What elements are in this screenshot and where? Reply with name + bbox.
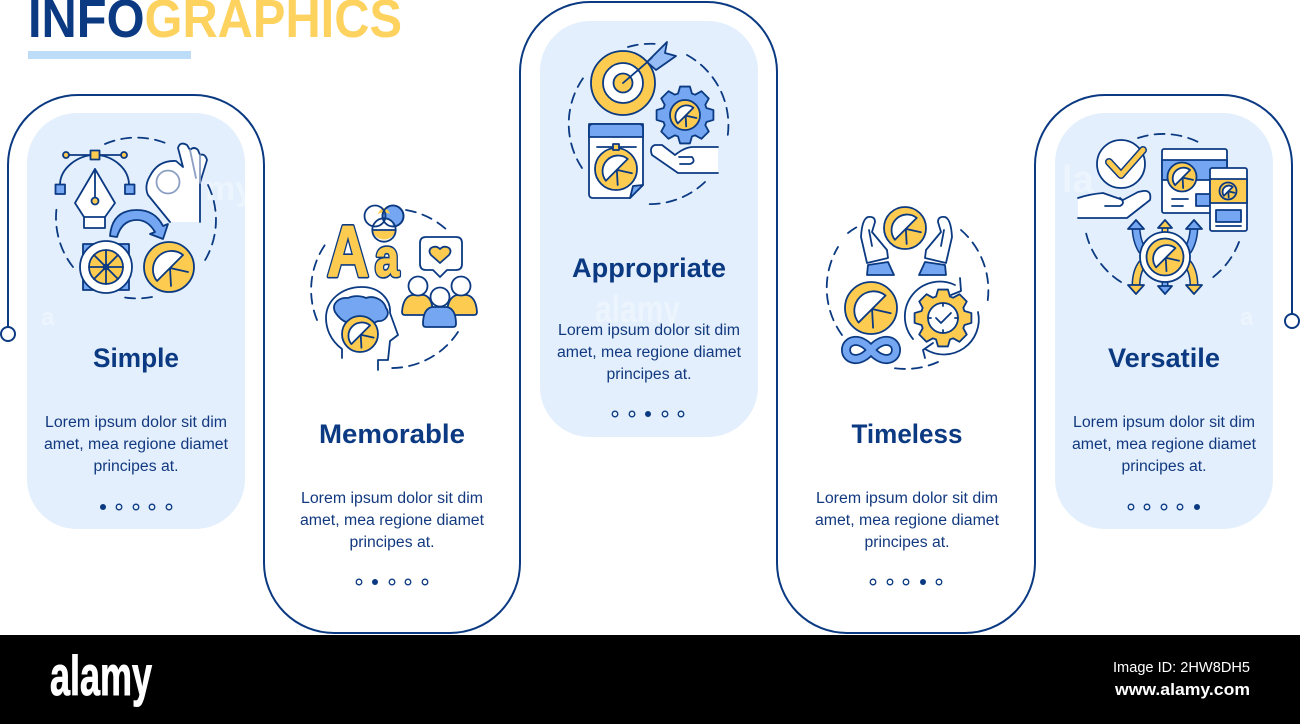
text: timeless: Lorem ipsum dolor sit dim bbox=[816, 490, 998, 507]
panel: versatile: la bbox=[1062, 159, 1095, 201]
text: appropriate bbox=[557, 322, 742, 383]
pagination: versatile bbox=[1128, 504, 1200, 510]
panel: versatile: a bbox=[1240, 304, 1254, 331]
text: memorable bbox=[300, 490, 485, 551]
footer logo: alamy bbox=[50, 644, 152, 707]
icon: appropriate bbox=[569, 42, 728, 204]
heading: versatile: Versatile bbox=[1108, 343, 1220, 373]
panel: simple bbox=[27, 113, 254, 529]
panel: simple: my bbox=[205, 170, 254, 208]
panel: simple: a bbox=[41, 304, 55, 331]
image id: Image ID: 2HW8DH5 bbox=[1113, 659, 1250, 676]
text: appropriate: Lorem ipsum dolor sit dim bbox=[558, 322, 740, 339]
icon: simple design bbox=[56, 138, 216, 298]
text: memorable: Lorem ipsum dolor sit dim bbox=[301, 490, 483, 507]
pagination: appropriate bbox=[612, 411, 684, 417]
pagination: timeless bbox=[870, 579, 942, 585]
icon: memorable: A bbox=[327, 212, 369, 292]
text: appropriate: amet, mea regione diamet bbox=[557, 344, 742, 361]
icon: memorable: a bbox=[375, 229, 399, 288]
heading: timeless: Timeless bbox=[852, 419, 962, 449]
text: versatile: amet, mea regione diamet bbox=[1072, 436, 1257, 453]
icon: versatile bbox=[1078, 134, 1247, 294]
panel: appropriate: alamy bbox=[595, 289, 680, 331]
text: simple: amet, mea regione diamet bbox=[44, 436, 229, 453]
text: versatile bbox=[1072, 414, 1257, 475]
website: www.alamy.com bbox=[1114, 680, 1250, 699]
text: versatile: Lorem ipsum dolor sit dim bbox=[1073, 414, 1255, 431]
text: memorable: principes at. bbox=[350, 534, 434, 551]
heading: simple: Simple bbox=[93, 343, 179, 373]
text: appropriate: principes at. bbox=[606, 366, 692, 383]
pagination: simple bbox=[100, 504, 172, 510]
text: timeless bbox=[815, 490, 1000, 551]
panel: memorable bbox=[300, 206, 485, 585]
text: versatile: principes at. bbox=[1122, 458, 1206, 475]
icon: timeless bbox=[827, 207, 988, 369]
text: timeless: principes at. bbox=[864, 534, 950, 551]
panel: versatile bbox=[1055, 113, 1273, 529]
text: simple: principes at. bbox=[94, 458, 178, 475]
text: simple bbox=[44, 414, 229, 475]
text: simple: Lorem ipsum dolor sit dim bbox=[45, 414, 227, 431]
pagination: memorable bbox=[356, 579, 428, 585]
icon: memorable bbox=[311, 206, 477, 370]
icon: memorable: A bbox=[327, 212, 369, 292]
text: timeless: amet, mea regione diamet bbox=[815, 512, 1000, 529]
footer bar bbox=[0, 635, 1300, 724]
panel: appropriate bbox=[540, 21, 758, 437]
heading: memorable: Memorable bbox=[319, 419, 465, 449]
heading: appropriate: Appropriate bbox=[572, 253, 726, 283]
panel: timeless bbox=[815, 207, 1000, 585]
text: memorable: amet, mea regione diamet bbox=[300, 512, 485, 529]
icon: memorable: a bbox=[375, 229, 399, 288]
